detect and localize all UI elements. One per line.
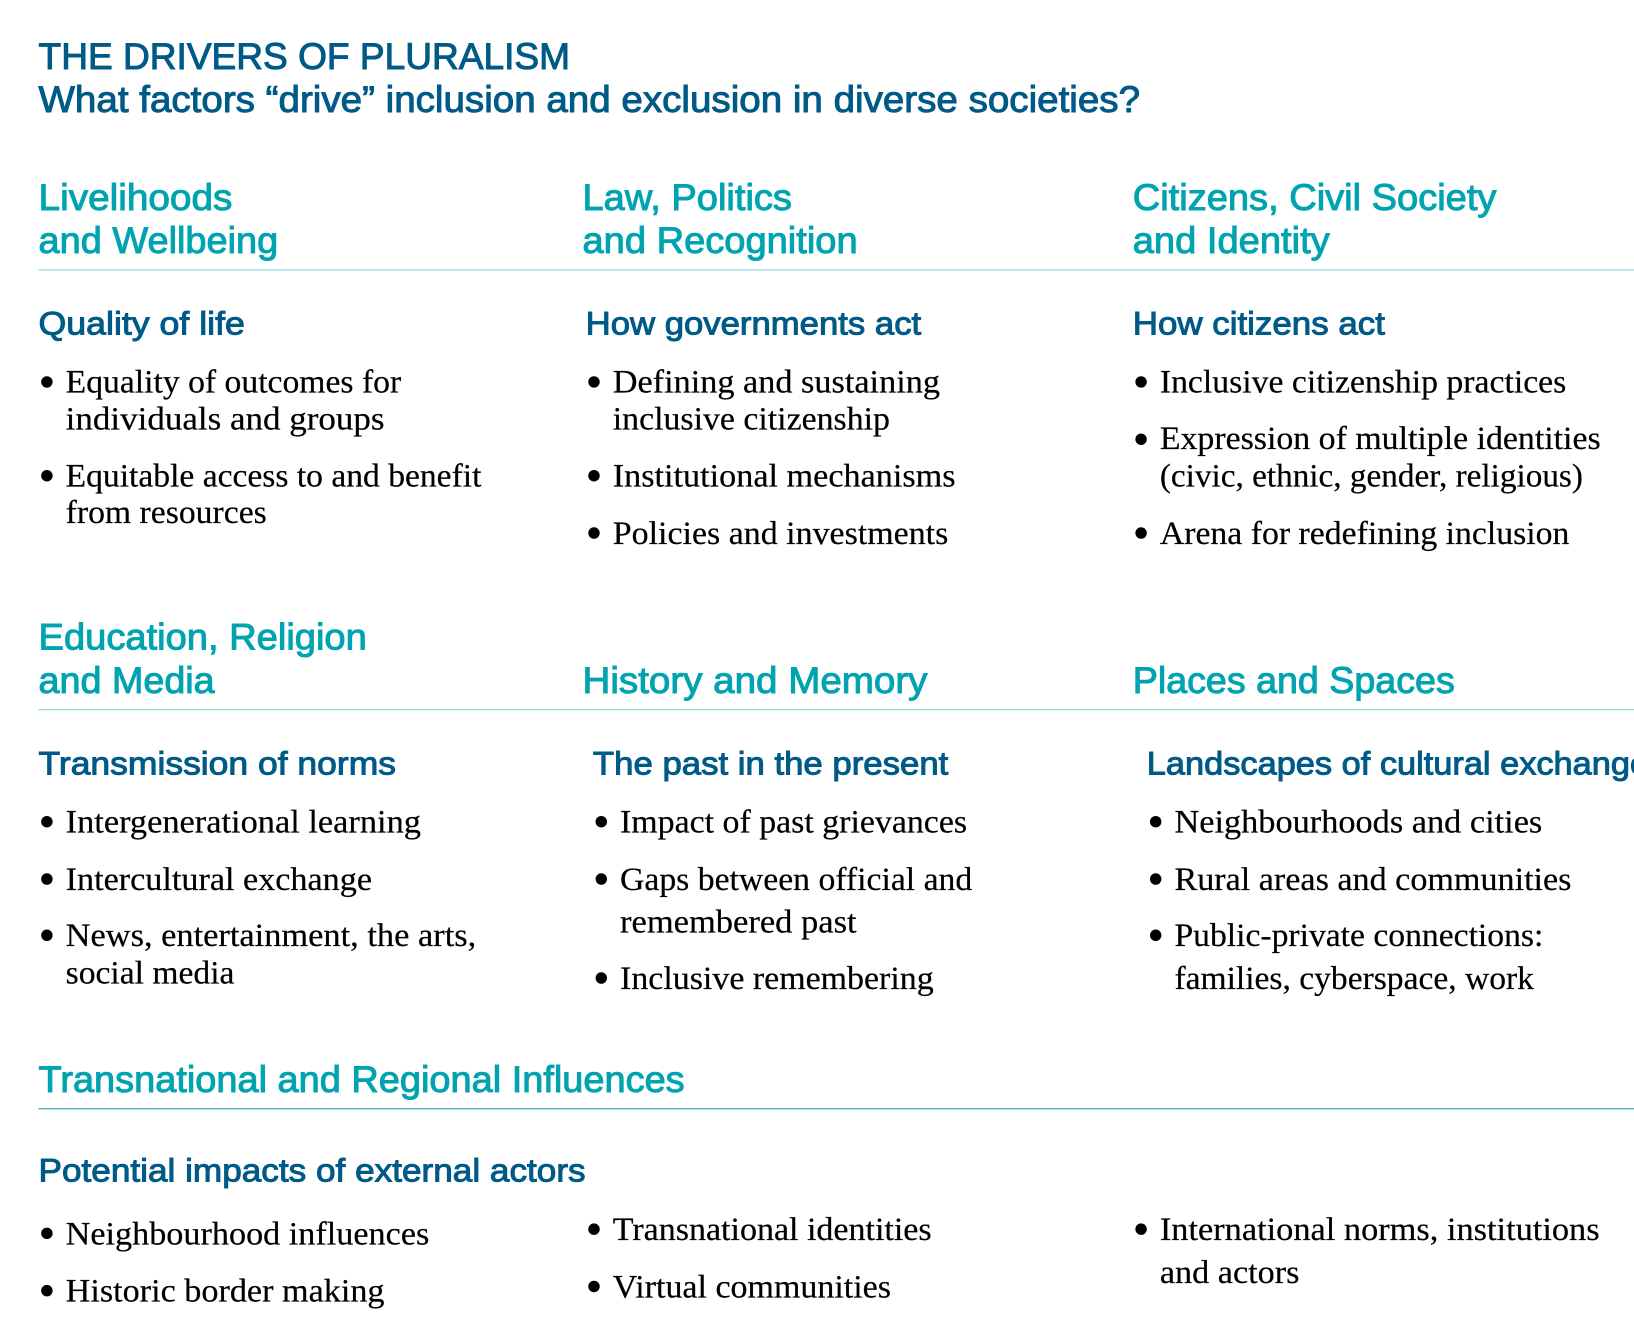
bullet list: column 2: Transnational identities [613,1211,932,1247]
title [39,36,1140,120]
heading: citizens, civil society and identity: Citizens, Civil Society [1133,177,1497,218]
heading: livelihoods and wellbeing [39,177,278,261]
heading: law, politics and recognition [583,177,858,261]
bullet list: column 2 [588,1211,932,1304]
subheading: the past in the present: The past in the present [593,744,948,781]
bullet list: how governments act: inclusive citizenship [613,400,890,436]
panel: law, politics and recognition [583,177,956,551]
bullet list: landscapes of cultural exchange: Public-private connections: [1174,917,1543,953]
panel: history and memory [583,660,972,996]
bullet list: transmission of norms: social media [66,955,234,991]
heading: citizens, civil society and identity: and Identity [1133,220,1330,261]
heading: education, religion and media: and Media [39,660,215,701]
subheading: transmission of norms: Transmission of norms [39,744,396,781]
bullet list: column 1: Historic border making [66,1273,385,1309]
panel: education, religion and media [39,617,476,991]
heading: livelihoods and wellbeing: and Wellbeing [39,220,278,261]
bullet list: column 3: International norms, institutions [1160,1211,1600,1247]
heading: places and spaces: Places and Spaces [1133,660,1455,701]
heading: transnational and regional influences: Transnational and Regional Influences [39,1059,685,1100]
bullet list: quality of life: Equitable access to and benefit [66,458,481,494]
subheading: potential impacts of external actors: Potential impacts of external actors [39,1152,586,1189]
title: THE DRIVERS OF PLURALISM [39,36,570,77]
bullet list: landscapes of cultural exchange: Neighbourhoods and cities [1174,804,1542,840]
heading: law, politics and recognition: and Recognition [583,220,858,261]
bullet list: how citizens act [1135,363,1601,551]
heading: history and memory: History and Memory [583,660,928,701]
bullet list: transmission of norms: Intergenerational learning [66,804,421,840]
bullet list: the past in the present: Inclusive remembering [620,960,934,996]
bullet list: how governments act: Institutional mechanisms [613,458,956,494]
title: What factors “drive” inclusion and exclusion in diverse societies? [39,79,1140,120]
heading: livelihoods and wellbeing: Livelihoods [39,177,232,218]
bullet list: column 2: Virtual communities [613,1268,891,1304]
bullet list: the past in the present: Impact of past grievances [620,804,967,840]
bullet list: how governments act: Policies and investments [613,515,948,551]
bullet list: the past in the present [596,804,972,996]
bullet list: landscapes of cultural exchange [1150,804,1571,996]
bullet list: how citizens act: Expression of multiple identities [1160,420,1601,456]
bullet list: the past in the present: remembered past [620,904,857,940]
bullet list: quality of life [41,363,481,530]
subheading: quality of life: Quality of life [39,305,245,342]
panel: livelihoods and wellbeing [39,177,481,530]
heading: education, religion and media [39,617,367,701]
panel: transnational and regional influences [39,1059,1600,1309]
subheading: landscapes of cultural exchange: Landscapes of cultural exchange [1147,744,1634,781]
heading: education, religion and media: Education, Religion [39,617,367,658]
bullet list: landscapes of cultural exchange: Rural areas and communities [1174,861,1571,897]
bullet list: quality of life: from resources [66,494,267,530]
bullet list: quality of life: Equality of outcomes for [66,363,401,399]
bullet list: how citizens act: Inclusive citizenship practices [1160,363,1566,399]
subheading: how governments act: How governments act [586,305,921,342]
bullet list: how citizens act: Arena for redefining inclusion [1160,515,1569,551]
bullet list: transmission of norms: News, entertainment, the arts, [66,917,476,953]
bullet list: column 1 [41,1215,429,1309]
bullet list: how citizens act: (civic, ethnic, gender, religious) [1160,458,1583,494]
bullet list: quality of life: individuals and groups [66,400,385,436]
heading: law, politics and recognition: Law, Politics [583,177,792,218]
bullet list: column 3 [1135,1211,1600,1290]
bullet list: landscapes of cultural exchange: families, cyberspace, work [1174,960,1535,996]
bullet list: the past in the present: Gaps between official and [620,861,972,897]
bullet list: how governments act: Defining and sustaining [613,363,940,399]
bullet list: column 3: and actors [1160,1254,1299,1290]
heading: citizens, civil society and identity [1133,177,1497,261]
subheading: how citizens act: How citizens act [1133,305,1385,342]
bullet list: transmission of norms [41,804,476,991]
bullet list: transmission of norms: Intercultural exchange [66,861,372,897]
panel: citizens, civil society and identity [1133,177,1601,551]
panel: places and spaces [1133,660,1634,996]
bullet list: column 1: Neighbourhood influences [66,1215,429,1251]
bullet list: how governments act [588,363,956,551]
